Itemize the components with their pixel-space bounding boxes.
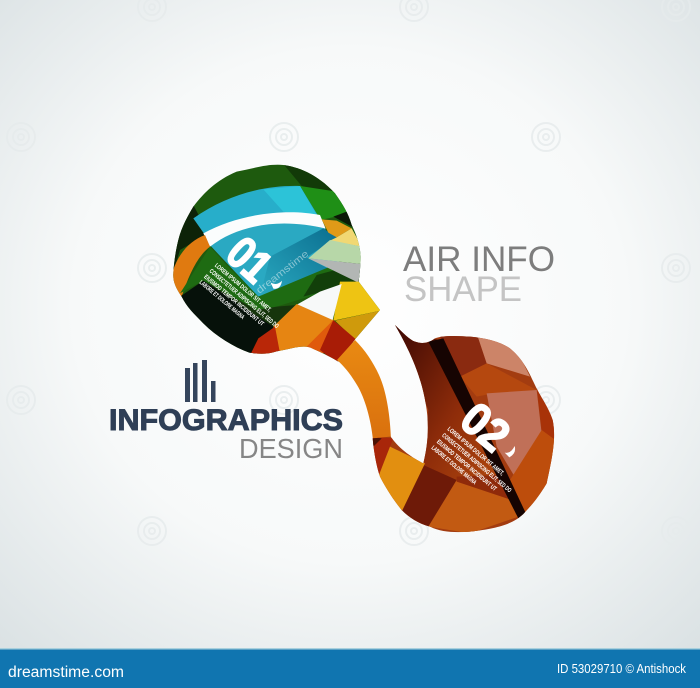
watermark pattern xyxy=(7,0,690,545)
diagonal deep teal band xyxy=(260,228,337,297)
cyan arc band xyxy=(193,186,321,235)
panel: shape 02 xyxy=(372,325,554,532)
black diagonal line xyxy=(428,338,527,518)
orange left arc xyxy=(170,235,210,297)
connector stem xyxy=(337,340,391,440)
heading: infographics design: DESIGN xyxy=(239,433,343,464)
teal lower field xyxy=(207,222,340,297)
crescent mark xyxy=(505,446,515,457)
number 02: 02 xyxy=(451,392,520,462)
body text 01: EIUSMOD TEMPOR INCIDIDUNT UT xyxy=(202,274,265,328)
body text 02 xyxy=(430,426,513,494)
right of black line xyxy=(440,333,487,377)
lower green band xyxy=(180,246,359,310)
body text 02: LABORE ET DOLORE MAGNA xyxy=(430,445,478,486)
icon: bars xyxy=(185,360,216,402)
panel: shape 01 with stem xyxy=(173,164,380,362)
body text 01: LABORE ET DOLORE MAGNA xyxy=(198,279,246,321)
heading: air info shape xyxy=(403,240,555,309)
left dark wedge xyxy=(173,206,204,273)
white arc xyxy=(203,212,326,247)
bottom black xyxy=(180,281,275,360)
heading: air info shape: AIR INFO xyxy=(403,240,555,279)
body text 02: EIUSMOD TEMPOR INCIDIDUNT UT xyxy=(435,439,498,493)
base xyxy=(372,325,554,532)
base green xyxy=(173,164,380,362)
left of black line xyxy=(395,325,496,532)
body text 02: LOREM IPSUM DOLOR SIT AMET, xyxy=(446,426,505,477)
crescent mark xyxy=(271,281,282,289)
watermark: dreamstime on shape 01: dreamstime xyxy=(254,248,312,296)
white notch xyxy=(297,284,342,320)
body text 01: CONSECTETUER ADIPISCING ELIT, SED DO xyxy=(208,268,280,330)
heading: infographics design: INFOGRAPHICS xyxy=(109,404,343,437)
footer bar xyxy=(0,648,700,688)
left stem colours xyxy=(372,438,393,474)
body text 01 xyxy=(198,262,280,330)
body text 01: LOREM IPSUM DOLOR SIT AMET, xyxy=(213,262,273,314)
right top fragments xyxy=(334,212,353,228)
heading: air info shape: SHAPE xyxy=(404,270,522,309)
number 01: 01 xyxy=(217,226,282,293)
yellow stem xyxy=(333,282,383,321)
footer credit: ID 53029710 © Antishock xyxy=(557,662,687,676)
body text 02: CONSECTETUER ADIPISCING ELIT, SED DO xyxy=(440,432,513,494)
heading: infographics design xyxy=(109,404,343,464)
orange stem xyxy=(273,304,333,353)
footer logo: dreamstime.com xyxy=(8,664,124,681)
